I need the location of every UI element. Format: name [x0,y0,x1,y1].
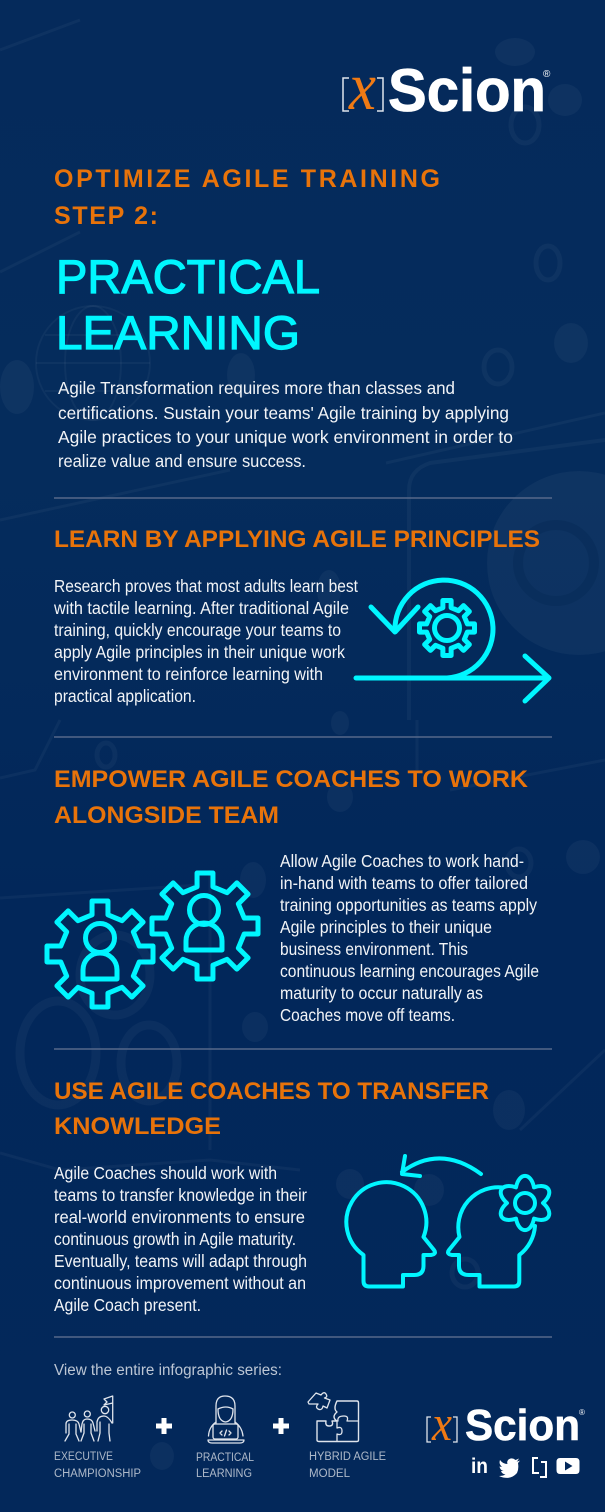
caption: hybrid agile model: HYBRID AGILE [309,1449,386,1463]
icon: practical learning coder [208,1396,244,1443]
caption: practical learning: PRACTICAL [196,1450,254,1464]
icon: two heads transferring knowledge [346,1156,549,1286]
section text: tactile learning: environment to reinforce learning with [54,664,323,684]
section heading: learn by applying: LEARN BY APPLYING AGILE PRINCIPLES [54,526,540,553]
heading: optimize agile training [54,165,440,230]
heading: optimize agile training: OPTIMIZE AGILE TRAINING [54,165,440,193]
intro paragraph: Agile Transformation requires more than classes and [58,378,455,398]
icon: plus [156,1418,172,1434]
section heading: empower agile coaches: EMPOWER AGILE COACHES TO WORK [54,766,528,793]
caption: executive championship: EXECUTIVE [54,1449,113,1463]
logo: xScion bottom: ® [579,1408,585,1417]
logo: xScion bottom: Scion [465,1401,580,1450]
section heading: empower agile coaches: ALONGSIDE TEAM [54,802,279,829]
social icons [471,1455,580,1478]
section text: coaches hand in hand: maturity to occur naturally as [280,983,483,1003]
icon: two gears with people [47,873,258,1007]
section text: tactile learning: with tactile learning. After traditional Agile [53,598,349,618]
title: practical learning: PRACTICAL [56,251,320,304]
caption: executive championship [54,1449,141,1480]
logo: xScion top [343,48,551,124]
section text: transfer knowledge: Agile Coaches should work with [54,1163,277,1183]
section heading: use agile coaches [54,1078,489,1140]
heading: optimize agile training: STEP 2: [54,202,158,230]
intro paragraph: realize value and ensure success. [58,451,306,471]
section heading: empower agile coaches [54,766,528,829]
icon: hybrid agile puzzle [308,1393,358,1442]
section text: transfer knowledge: continuous improvement without an [54,1273,306,1293]
section text: tactile learning: apply Agile principles in their unique work [54,642,345,662]
caption: practical learning: LEARNING [196,1466,252,1480]
logo: xScion top: x [348,48,376,124]
section text: coaches hand in hand [280,851,539,1025]
icon: plus [273,1418,289,1434]
caption: practical learning [196,1450,254,1480]
section text: tactile learning [53,576,358,706]
logo: xScion bottom [427,1395,585,1451]
section text: tactile learning: Research proves that most adults learn best [54,576,358,596]
section heading: use agile coaches: KNOWLEDGE [54,1113,221,1140]
section text: coaches hand in hand: Allow Agile Coaches to work hand- [280,851,524,871]
intro paragraph: certifications. Sustain your teams' Agile training by applying [58,403,509,423]
icon: iteration loop with gear [356,580,549,701]
series label: View the entire infographic series: [54,1362,282,1379]
section text: coaches hand in hand: training opportunities as teams apply [280,895,537,915]
section text: coaches hand in hand: Agile principles to their unique [280,917,492,937]
icon: executive championship [65,1396,113,1441]
title: practical learning: LEARNING [56,307,300,360]
caption: executive championship: CHAMPIONSHIP [54,1466,141,1480]
section text: transfer knowledge: continuous growth in Agile maturity. [54,1229,296,1249]
caption: hybrid agile model: MODEL [309,1466,350,1480]
section text: transfer knowledge: Agile Coach present. [54,1295,201,1315]
logo: xScion top: ® [543,69,551,80]
section text: coaches hand in hand: in-hand with teams to offer tailored [280,873,528,893]
section text: coaches hand in hand: Coaches move off teams. [280,1005,455,1025]
section text: tactile learning: training, quickly encourage your teams to [54,620,341,640]
section text: coaches hand in hand: continuous learning encourages Agile [280,961,539,981]
title: practical learning [56,251,320,360]
section text: transfer knowledge: real-world environments to ensure [54,1207,305,1227]
logo: xScion bottom: x [431,1395,452,1451]
section text: transfer knowledge: teams to transfer knowledge in their [54,1185,307,1205]
intro paragraph: Agile practices to your unique work environment in order to [58,427,513,447]
intro paragraph [58,378,513,471]
section heading: use agile coaches: USE AGILE COACHES TO TRANSFER [54,1078,489,1105]
section text: transfer knowledge [54,1163,307,1315]
section text: transfer knowledge: Eventually, teams will adapt through [54,1251,307,1271]
caption: hybrid agile model [309,1449,386,1480]
social icons: in [471,1455,488,1478]
section text: tactile learning: practical application. [54,686,196,706]
logo: xScion top: Scion [388,57,546,124]
section text: coaches hand in hand: business environment. This [280,939,468,959]
